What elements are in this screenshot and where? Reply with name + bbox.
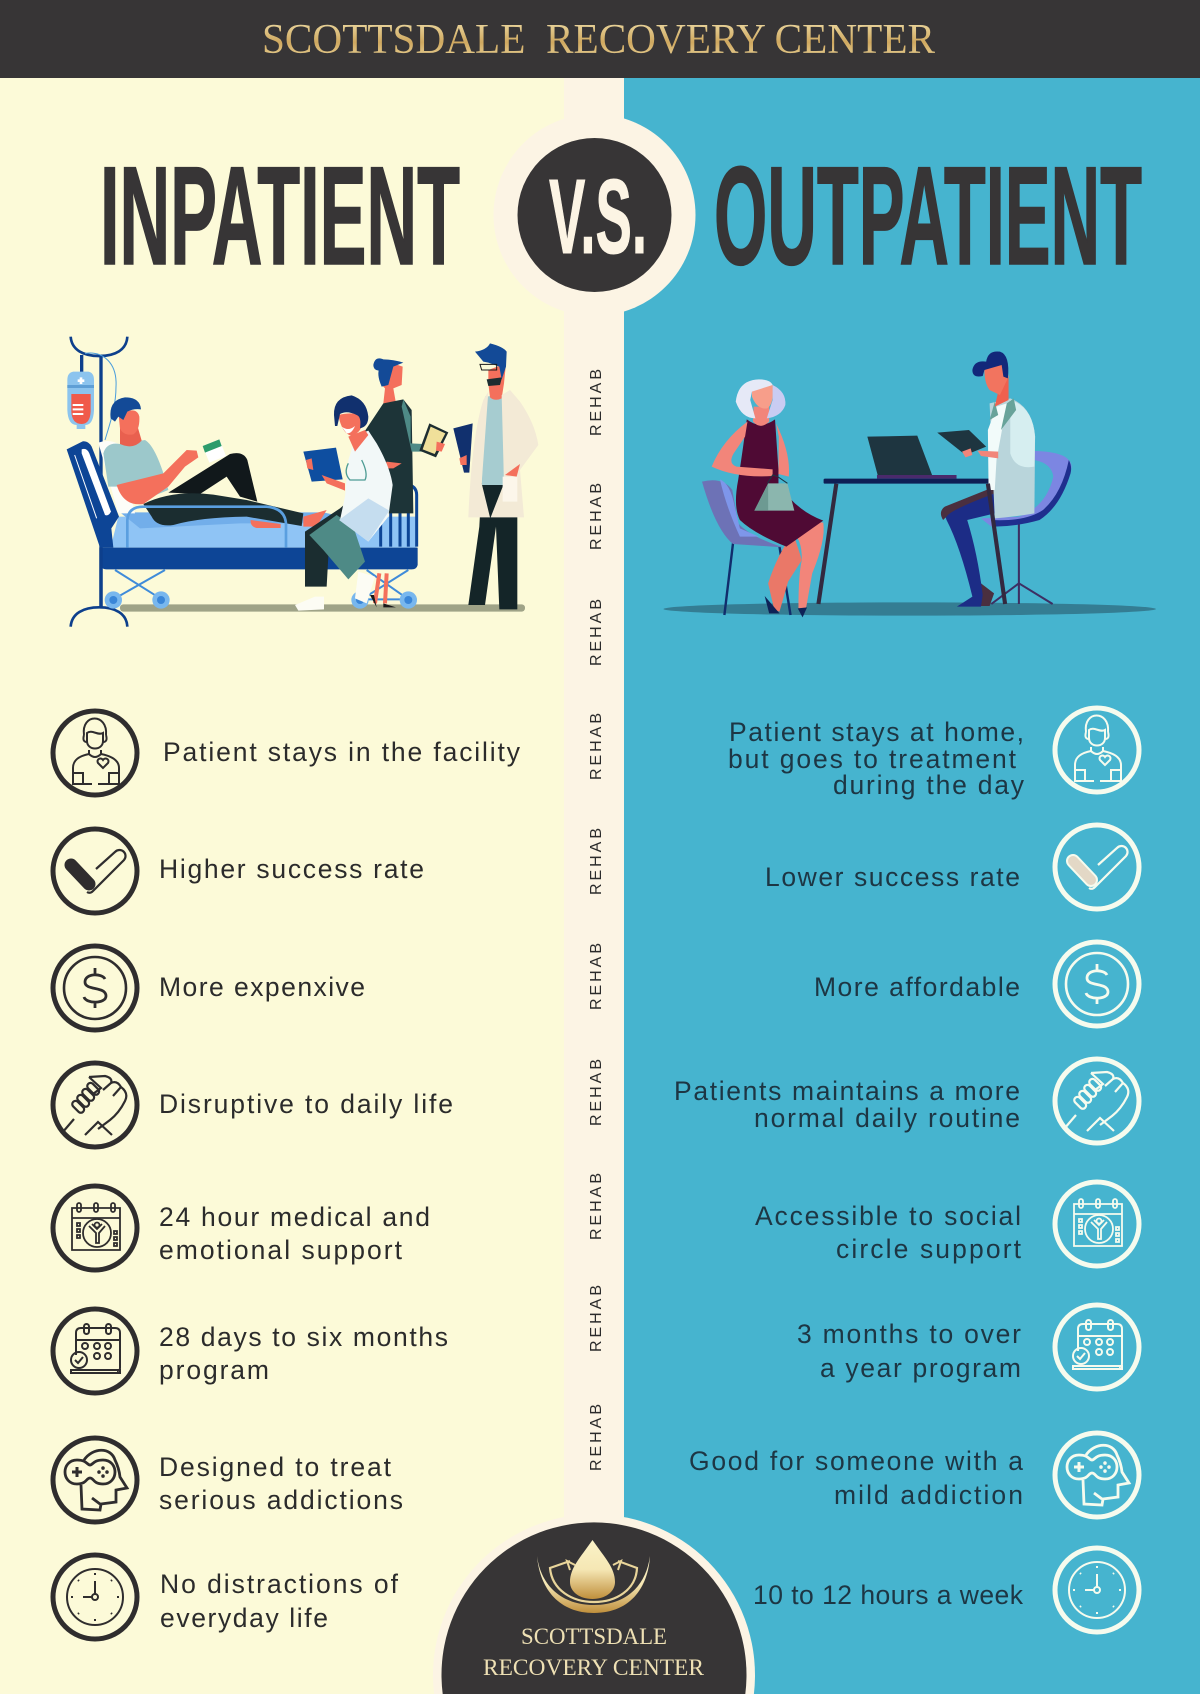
text: program: 3 months to over bbox=[797, 1319, 1021, 1349]
icon: clock bbox=[53, 1555, 137, 1639]
text: stays at home: but goes to treatment bbox=[728, 744, 1017, 774]
rehab vertical labels: REHAB bbox=[588, 713, 605, 780]
text: addictions: serious addictions bbox=[159, 1485, 403, 1515]
icon: hands bbox=[53, 1063, 137, 1147]
icon: calendar program bbox=[1055, 1305, 1139, 1389]
panel: outpatient background bbox=[623, 78, 1200, 1694]
text: addiction: mild addiction bbox=[834, 1480, 1023, 1510]
nurse bbox=[363, 358, 448, 607]
text: stays at home: Patient stays at home, bbox=[729, 717, 1024, 747]
text: stays at home bbox=[728, 717, 1025, 800]
panel: inpatient background bbox=[0, 78, 565, 1694]
text: distractions: No distractions of bbox=[160, 1569, 399, 1599]
text: program: a year program bbox=[820, 1353, 1021, 1383]
table leg front bbox=[988, 484, 1005, 604]
icon: person bbox=[1055, 708, 1139, 792]
text: stays at home: during the day bbox=[833, 770, 1025, 800]
laptop bbox=[824, 436, 995, 484]
header title: SCOTTSDALE RECOVERY CENTER bbox=[262, 17, 935, 63]
rehab vertical labels: REHAB bbox=[588, 1285, 605, 1352]
text: addictions bbox=[159, 1452, 403, 1515]
text: patient stays: Patient stays in the facility bbox=[163, 737, 521, 767]
text: social support bbox=[755, 1201, 1022, 1264]
icon: dollar bbox=[53, 946, 137, 1030]
woman bbox=[712, 379, 824, 617]
text: program bbox=[159, 1322, 448, 1385]
foot rail bbox=[381, 484, 417, 547]
text: addiction bbox=[689, 1446, 1023, 1510]
doctor chair bbox=[981, 451, 1072, 604]
text: distractions: everyday life bbox=[160, 1603, 328, 1633]
icon: calendar program bbox=[53, 1309, 137, 1393]
header bar bbox=[0, 0, 1200, 78]
seated doctor bbox=[295, 395, 393, 611]
text: routine bbox=[674, 1076, 1020, 1133]
panel: outpatient list bbox=[674, 708, 1139, 1632]
icon: person bbox=[53, 711, 137, 795]
icon: clock bbox=[1055, 1548, 1139, 1632]
logo text: SCOTTSDALE bbox=[521, 1624, 667, 1649]
text: support bbox=[159, 1202, 430, 1265]
versus text: V.S. bbox=[549, 158, 647, 276]
icon: head bbox=[1055, 1433, 1139, 1517]
text: social support: circle support bbox=[836, 1234, 1022, 1264]
text: addiction: Good for someone with a bbox=[689, 1446, 1023, 1476]
panel: inpatient list bbox=[53, 711, 521, 1639]
logo text bbox=[483, 1624, 705, 1680]
text: program bbox=[797, 1319, 1021, 1383]
doctor bbox=[937, 351, 1035, 607]
mattress bbox=[111, 517, 417, 548]
logo text: RECOVERY CENTER bbox=[483, 1655, 705, 1680]
illustration: hospital bed scene bbox=[67, 337, 538, 627]
text: disruption: Disruptive to daily life bbox=[159, 1089, 453, 1119]
text: routine: normal daily routine bbox=[754, 1103, 1020, 1133]
rehab vertical labels: REHAB bbox=[588, 943, 605, 1010]
patient bbox=[103, 397, 327, 528]
text: cost: More affordable bbox=[814, 972, 1020, 1002]
text: cost: More expenxive bbox=[159, 972, 365, 1002]
text: success: Lower success rate bbox=[765, 862, 1020, 892]
illustration: outpatient consultation scene bbox=[663, 351, 1156, 617]
rehab vertical labels: REHAB bbox=[588, 1059, 605, 1126]
table leg back bbox=[818, 484, 836, 604]
icon: check bbox=[53, 829, 137, 913]
text: routine: Patients maintains a more bbox=[674, 1076, 1020, 1106]
heading: inpatient: INPATIENT bbox=[100, 137, 460, 294]
versus badge bbox=[494, 114, 696, 316]
rehab vertical labels: REHAB bbox=[588, 599, 605, 666]
rehab vertical labels: REHAB bbox=[588, 369, 605, 436]
woman chair bbox=[702, 479, 791, 615]
text: social support: Accessible to social bbox=[755, 1201, 1021, 1231]
text: program: program bbox=[159, 1355, 269, 1385]
rehab vertical labels: REHAB bbox=[588, 1173, 605, 1240]
rehab vertical labels: REHAB bbox=[588, 483, 605, 550]
icon: calendar support bbox=[1055, 1182, 1139, 1266]
text: success: Higher success rate bbox=[159, 854, 424, 884]
rehab vertical labels bbox=[588, 369, 605, 1471]
text: addictions: Designed to treat bbox=[159, 1452, 392, 1482]
icon: calendar support bbox=[53, 1186, 137, 1270]
standing doctor bbox=[453, 343, 538, 609]
text: hours: 10 to 12 hours a week bbox=[753, 1580, 1024, 1610]
icon: lotus drop bbox=[537, 1540, 650, 1613]
text: program: 28 days to six months bbox=[159, 1322, 448, 1352]
text: distractions bbox=[160, 1569, 399, 1633]
icon: dollar bbox=[1055, 942, 1139, 1026]
footer logo badge bbox=[433, 1514, 755, 1694]
icon: head bbox=[53, 1438, 137, 1522]
icon: hands bbox=[1055, 1059, 1139, 1143]
text: support: emotional support bbox=[159, 1235, 403, 1265]
rehab vertical labels: REHAB bbox=[588, 828, 605, 895]
text: support: 24 hour medical and bbox=[159, 1202, 430, 1232]
icon: check bbox=[1055, 825, 1139, 909]
center strip bbox=[564, 78, 624, 1694]
rehab vertical labels: REHAB bbox=[588, 1404, 605, 1471]
